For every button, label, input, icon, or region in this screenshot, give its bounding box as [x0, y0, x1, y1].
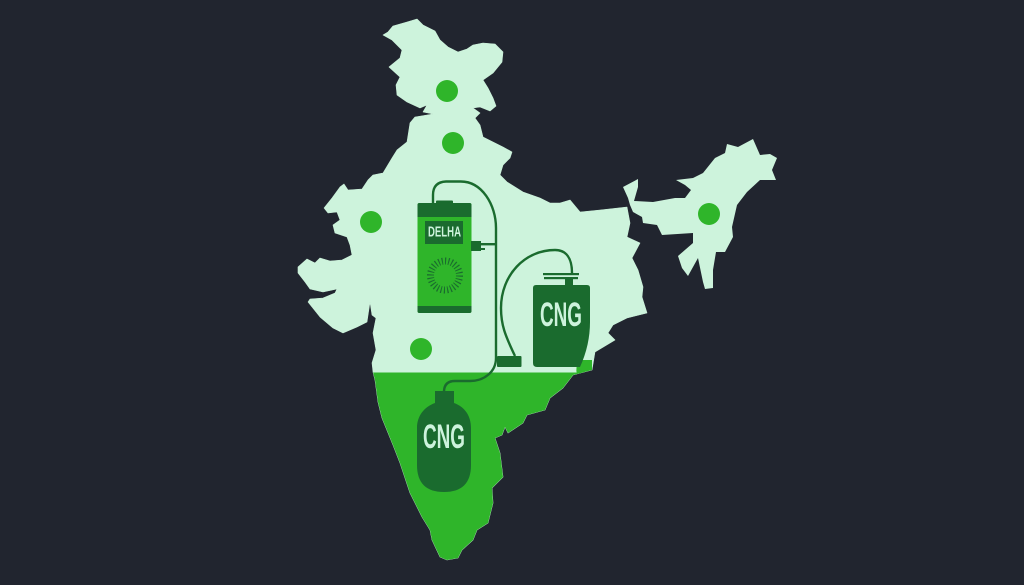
cable: battery to bottom cylinder — [433, 181, 496, 392]
battery plug — [471, 241, 496, 251]
base unit — [497, 356, 522, 367]
map of India: mainland — [298, 19, 647, 560]
location dots — [360, 80, 720, 360]
CNG tank with valve: CNG — [540, 296, 582, 334]
CNG gas cylinder: CNG — [423, 418, 465, 456]
CNG gas cylinder — [417, 391, 471, 492]
green patch on east coast — [576, 360, 592, 374]
map of India: north-east region — [623, 139, 777, 289]
CNG tank with valve — [533, 273, 590, 367]
green battery labelled DELHA: DELHA — [428, 224, 461, 240]
green battery labelled DELHA — [418, 200, 472, 313]
southern green region — [372, 363, 592, 560]
cable: base unit to CNG tank — [501, 250, 572, 356]
